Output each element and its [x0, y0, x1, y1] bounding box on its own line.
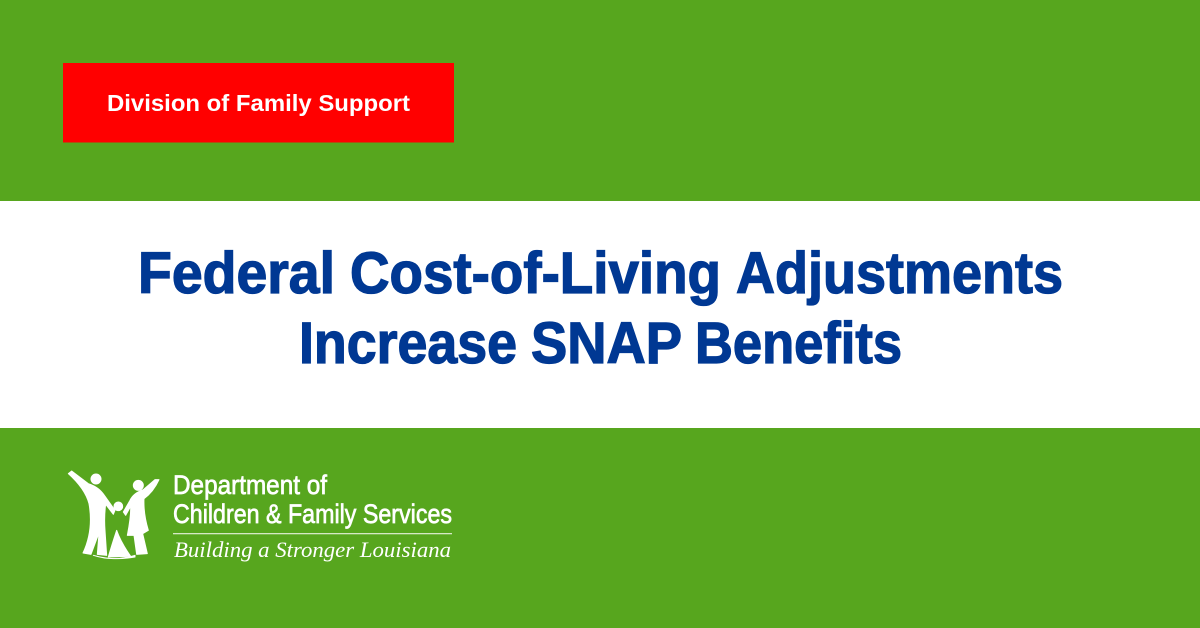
- title: SNAP: [531, 311, 682, 376]
- badge: Division of Family Support: Division of Family Support: [107, 90, 410, 116]
- icon: family figures: [68, 471, 159, 559]
- title: Increase: [299, 311, 517, 376]
- logo name: [173, 470, 452, 529]
- title: [138, 241, 1063, 376]
- title: Benefits: [695, 311, 902, 376]
- white title band: [0, 201, 1200, 428]
- title: Cost-of-Living: [350, 241, 721, 306]
- logo name: Children & Family Services: [173, 499, 452, 529]
- logo tagline: Building a Stronger Louisiana: [174, 537, 451, 562]
- badge: Division of Family Support: [63, 63, 454, 142]
- logo: Department of Children & Family Services: [68, 470, 452, 562]
- logo name: Department of: [173, 470, 327, 500]
- title: Adjustments: [736, 241, 1063, 306]
- title: Federal: [138, 241, 335, 306]
